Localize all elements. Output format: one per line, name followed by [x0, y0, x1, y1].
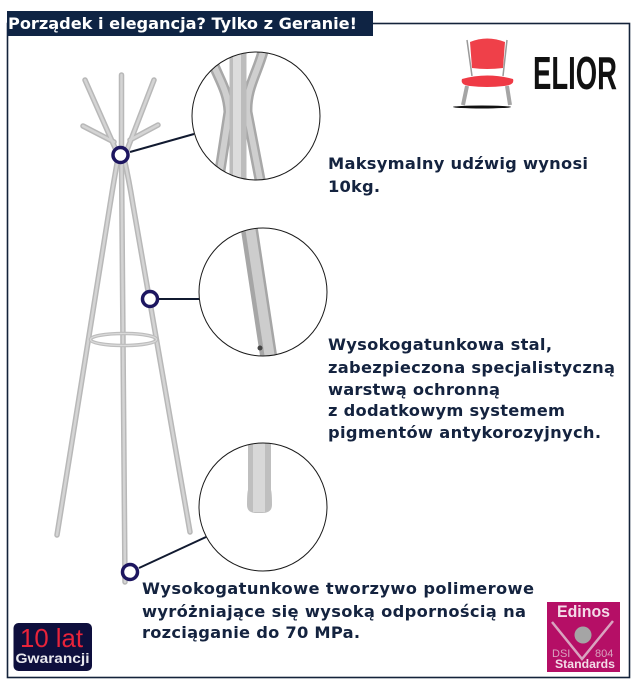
- text: polymer description: wyróżniające się wysoką odpornością na: [142, 602, 526, 621]
- text: load capacity: [328, 154, 588, 196]
- logo: chair: [453, 38, 513, 108]
- badge: 10 years warranty: [14, 623, 92, 671]
- badge: Edinos standards: DSI: [552, 648, 570, 660]
- badge: 10 years warranty: 10 lat: [20, 623, 84, 653]
- callout markers: [113, 148, 158, 580]
- detail circle: polymer foot: [199, 440, 327, 571]
- detail circle: steel tube: [198, 228, 328, 356]
- detail circle: top joint: [192, 48, 320, 190]
- coat stand illustration: [57, 75, 190, 582]
- badge: Edinos standards: 804: [595, 648, 613, 660]
- text: steel description: Wysokogatunkowa stal,: [328, 335, 552, 354]
- text: load capacity: Maksymalny udźwig wynosi: [328, 154, 588, 173]
- text: steel description: warstwą ochronną: [328, 380, 500, 399]
- text: load capacity: 10kg.: [328, 177, 380, 196]
- title banner: Porządek i elegancja? Tylko z Geranie!: [8, 14, 357, 33]
- badge: 10 years warranty: Gwarancji: [16, 650, 90, 666]
- text: polymer description: rozciąganie do 70 MPa.: [142, 623, 360, 642]
- badge: Edinos standards: Standards: [555, 659, 615, 671]
- connector lines: [130, 134, 206, 568]
- text: steel description: [328, 335, 615, 442]
- text: polymer description: [142, 579, 534, 642]
- badge: Edinos standards: Edinos: [557, 603, 610, 621]
- text: steel description: pigmentów antykorozyjnych.: [328, 423, 601, 442]
- text: steel description: z dodatkowym systemem: [328, 401, 565, 420]
- text: polymer description: Wysokogatunkowe tworzywo polimerowe: [142, 579, 534, 598]
- text: steel description: zabezpieczona specjalistyczną: [328, 358, 615, 377]
- badge: Edinos standards: [547, 602, 620, 672]
